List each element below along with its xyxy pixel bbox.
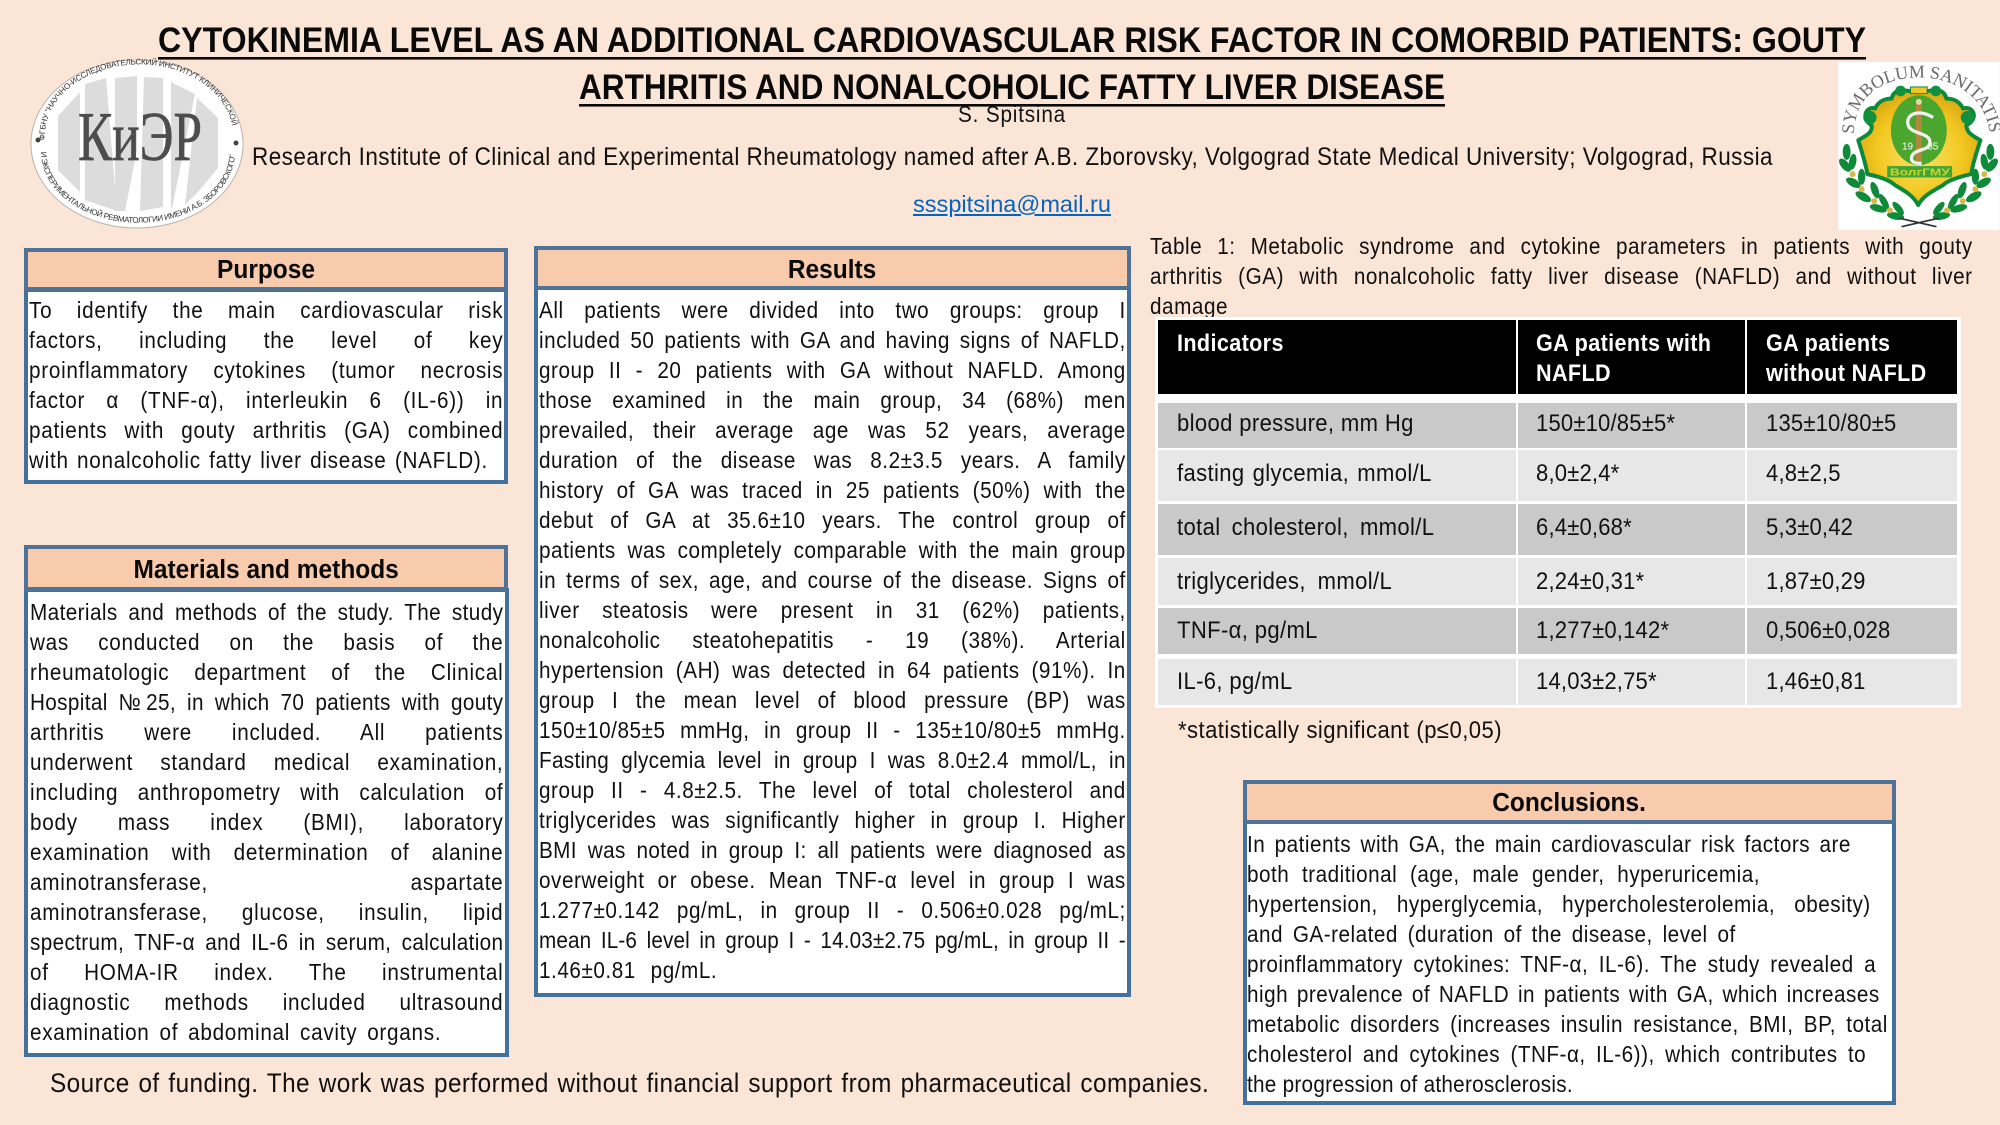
conclusions body <box>1243 820 1896 1105</box>
row: TNF-alpha: 0,506±0,028 <box>1766 617 1890 644</box>
results text: group II - 4.8±2.5. The level of total cholesterol and <box>539 777 1126 803</box>
materials text: Materials and methods of the study. The study <box>30 599 503 625</box>
table header row: GA patients <box>1766 330 1890 357</box>
table caption: Table 1: Metabolic syndrome and cytokine parameters in patients with gouty <box>1150 233 1973 259</box>
email link: ssspitsina@mail.ru <box>913 191 1111 217</box>
purpose text: factors, including the level of key <box>29 327 503 353</box>
icon: institute logo <box>30 58 244 228</box>
table caption: damage <box>1150 293 1228 319</box>
row: blood pressure: blood pressure, mm Hg <box>1177 410 1414 437</box>
icon: university emblem: 35 <box>1927 141 1939 152</box>
results text: 1.46±0.81 pg/mL. <box>539 957 717 983</box>
results text: overweight or obese. Mean TNF-α level in group I was <box>539 867 1126 893</box>
row: fasting glycemia <box>1158 450 1957 501</box>
conclusions text <box>1247 831 1888 1097</box>
title <box>158 21 1866 107</box>
row: fasting glycemia: 4,8±2,5 <box>1766 460 1841 487</box>
row: triglycerides: 1,87±0,29 <box>1766 568 1866 595</box>
results text: mean IL-6 level in group I - 14.03±2.75 pg/mL, in group II - <box>539 927 1126 953</box>
results text: group II - 20 patients with GA without NAFLD. Among <box>539 357 1126 383</box>
conclusions text: proinflammatory cytokines: TNF-α, IL-6). The study revealed a <box>1247 951 1876 977</box>
table footnote: *statistically significant (p≤0,05) <box>1178 717 1502 744</box>
row: triglycerides: triglycerides, mmol/L <box>1177 568 1392 595</box>
results text: prevailed, their average age was 52 years, average <box>539 417 1126 443</box>
funding note: Source of funding. The work was performed without financial support from pharmaceutical companies. <box>50 1068 1209 1098</box>
materials text: examination with determination of alanine <box>30 839 503 865</box>
results text: 1.277±0.142 pg/mL, in group II - 0.506±0.028 pg/mL; <box>539 897 1126 923</box>
table header row: GA patients with <box>1536 330 1711 357</box>
table header row: without NAFLD <box>1766 360 1927 387</box>
results text: All patients were divided into two groups: group I <box>539 297 1126 323</box>
materials text: body mass index (BMI), laboratory <box>30 809 503 835</box>
results text: patients was completely comparable with the main group <box>539 537 1126 563</box>
results text: group I the mean level of blood pressure (BP) was <box>539 687 1126 713</box>
purpose text: proinflammatory cytokines (tumor necrosis <box>29 357 503 383</box>
results text: debut of GA at 35.6±10 years. The control group of <box>539 507 1126 533</box>
materials text: Hospital №25, in which 70 patients with gouty <box>30 689 503 715</box>
purpose text: factor α (TNF-α), interleukin 6 (IL-6)) in <box>29 387 503 413</box>
results text <box>539 297 1126 983</box>
table header row: NAFLD <box>1536 360 1611 387</box>
purpose text <box>29 297 503 473</box>
author: S. Spitsina <box>958 101 1066 127</box>
materials body <box>24 588 509 1057</box>
conclusions text: high prevalence of NAFLD in patients with GA, which increases <box>1247 981 1880 1007</box>
materials heading <box>24 545 508 591</box>
results text: Fasting glycemia level in group I was 8.0±2.4 mmol/L, in <box>539 747 1126 773</box>
results text: history of GA was traced in 25 patients (50%) with the <box>539 477 1126 503</box>
results text: duration of the disease was 8.2±3.5 years. A family <box>539 447 1126 473</box>
conclusions text: metabolic disorders (increases insulin resistance, BMI, BP, total <box>1247 1011 1888 1037</box>
conclusions heading: Conclusions. <box>1493 789 1646 817</box>
results heading <box>534 246 1131 290</box>
conclusions heading <box>1243 780 1896 824</box>
row: total cholesterol: total cholesterol, mmol/L <box>1177 514 1434 541</box>
results text: in terms of sex, age, and course of the disease. Signs of <box>539 567 1126 593</box>
materials text: including anthropometry with calculation of <box>30 779 503 805</box>
panel: materials and methods <box>24 545 509 1057</box>
row: IL-6: 1,46±0,81 <box>1766 668 1866 695</box>
materials text: of HOMA-IR index. The instrumental <box>30 959 503 985</box>
results heading: Results <box>788 256 877 284</box>
purpose text: patients with gouty arthritis (GA) combined <box>29 417 503 443</box>
row: blood pressure: 150±10/85±5* <box>1536 410 1675 437</box>
icon: institute logo: КиЭР <box>78 99 202 176</box>
materials text: aminotransferase, aspartate <box>30 869 503 895</box>
icon: institute logo: ФГБНУ "НАУЧНО-ИССЛЕДОВАТЕЛЬСКИЙ ИНСТИТУТ КЛИНИЧЕСКОЙ <box>39 58 239 140</box>
row: TNF-alpha <box>1158 608 1957 654</box>
table <box>1155 317 1961 708</box>
results text: hypertension (AH) was detected in 64 patients (91%). In <box>539 657 1126 683</box>
row: blood pressure <box>1158 403 1957 448</box>
materials text: diagnostic methods included ultrasound <box>30 989 503 1015</box>
row: total cholesterol <box>1158 504 1957 555</box>
results text: BMI was noted in group I: all patients were diagnosed as <box>539 837 1126 863</box>
materials text <box>30 599 503 1045</box>
table header row <box>1158 320 1957 394</box>
purpose text: To identify the main cardiovascular risk <box>29 297 503 323</box>
row: total cholesterol: 6,4±0,68* <box>1536 514 1632 541</box>
results text: nonalcoholic steatohepatitis - 19 (38%). Arterial <box>539 627 1126 653</box>
results text: triglycerides was significantly higher in group I. Higher <box>539 807 1126 833</box>
panel: conclusions <box>1243 780 1896 1105</box>
row: IL-6 <box>1158 659 1957 705</box>
title: CYTOKINEMIA LEVEL AS AN ADDITIONAL CARDIOVASCULAR RISK FACTOR IN COMORBID PATIENTS: GOUTY <box>158 21 1866 60</box>
row: IL-6: IL-6, pg/mL <box>1177 668 1292 695</box>
title: ARTHRITIS AND NONALCOHOLIC FATTY LIVER DISEASE <box>579 68 1445 107</box>
row: total cholesterol: 5,3±0,42 <box>1766 514 1853 541</box>
purpose text: with nonalcoholic fatty liver disease (NAFLD). <box>29 447 488 473</box>
icon: institute logo: И ЭКСПЕРИМЕНТАЛЬНОЙ РЕВМАТОЛОГИИ ИМЕНИ А.Б. ЗБОРОВСКОГО" <box>40 152 234 223</box>
materials text: underwent standard medical examination, <box>30 749 503 775</box>
icon: university emblem: 19 <box>1902 141 1914 152</box>
table caption: arthritis (GA) with nonalcoholic fatty liver disease (NAFLD) and without liver <box>1150 263 1973 289</box>
results text: those examined in the main group, 34 (68%) men <box>539 387 1126 413</box>
row: fasting glycemia: 8,0±2,4* <box>1536 460 1619 487</box>
purpose heading: Purpose <box>217 256 315 284</box>
row: triglycerides <box>1158 558 1957 605</box>
conclusions text: and GA-related (duration of the disease, level of <box>1247 921 1736 947</box>
affiliation: Research Institute of Clinical and Experimental Rheumatology named after A.B. Zborovsky, Volgograd State Medical University; Volgograd, Russia <box>252 143 1773 171</box>
table header row: Indicators <box>1177 330 1284 357</box>
row: TNF-alpha: 1,277±0,142* <box>1536 617 1669 644</box>
table caption <box>1150 233 1973 319</box>
panel: results <box>534 246 1131 997</box>
row: triglycerides: 2,24±0,31* <box>1536 568 1644 595</box>
results body <box>534 286 1131 997</box>
row: TNF-alpha: TNF-α, pg/mL <box>1177 617 1318 644</box>
results text: liver steatosis were present in 31 (62%) patients, <box>539 597 1126 623</box>
row: IL-6: 14,03±2,75* <box>1536 668 1657 695</box>
conclusions text: hypertension, hyperglycemia, hypercholesterolemia, obesity) <box>1247 891 1871 917</box>
materials text: aminotransferase, glucose, insulin, lipid <box>30 899 503 925</box>
conclusions text: the progression of atherosclerosis. <box>1247 1071 1573 1097</box>
materials text: examination of abdominal cavity organs. <box>30 1019 441 1045</box>
materials heading: Materials and methods <box>133 556 399 584</box>
icon: university emblem: ВолгГМУ <box>1890 167 1951 178</box>
purpose body <box>24 288 508 484</box>
materials text: was conducted on the basis of the <box>30 629 503 655</box>
row: blood pressure: 135±10/80±5 <box>1766 410 1896 437</box>
materials text: rheumatologic department of the Clinical <box>30 659 503 685</box>
row: fasting glycemia: fasting glycemia, mmol/L <box>1177 460 1432 487</box>
panel: purpose <box>24 248 508 484</box>
icon: university emblem <box>1838 62 2000 230</box>
conclusions text: cholesterol and cytokines (TNF-α, IL-6)), which contributes to <box>1247 1041 1866 1067</box>
results text: included 50 patients with GA and having signs of NAFLD, <box>539 327 1126 353</box>
materials text: spectrum, TNF-α and IL-6 in serum, calculation <box>30 929 503 955</box>
materials text: arthritis were included. All patients <box>30 719 503 745</box>
conclusions text: In patients with GA, the main cardiovascular risk factors are <box>1247 831 1851 857</box>
conclusions text: both traditional (age, male gender, hyperuricemia, <box>1247 861 1760 887</box>
purpose heading <box>24 248 508 291</box>
results text: 150±10/85±5 mmHg, in group II - 135±10/80±5 mmHg. <box>539 717 1126 743</box>
